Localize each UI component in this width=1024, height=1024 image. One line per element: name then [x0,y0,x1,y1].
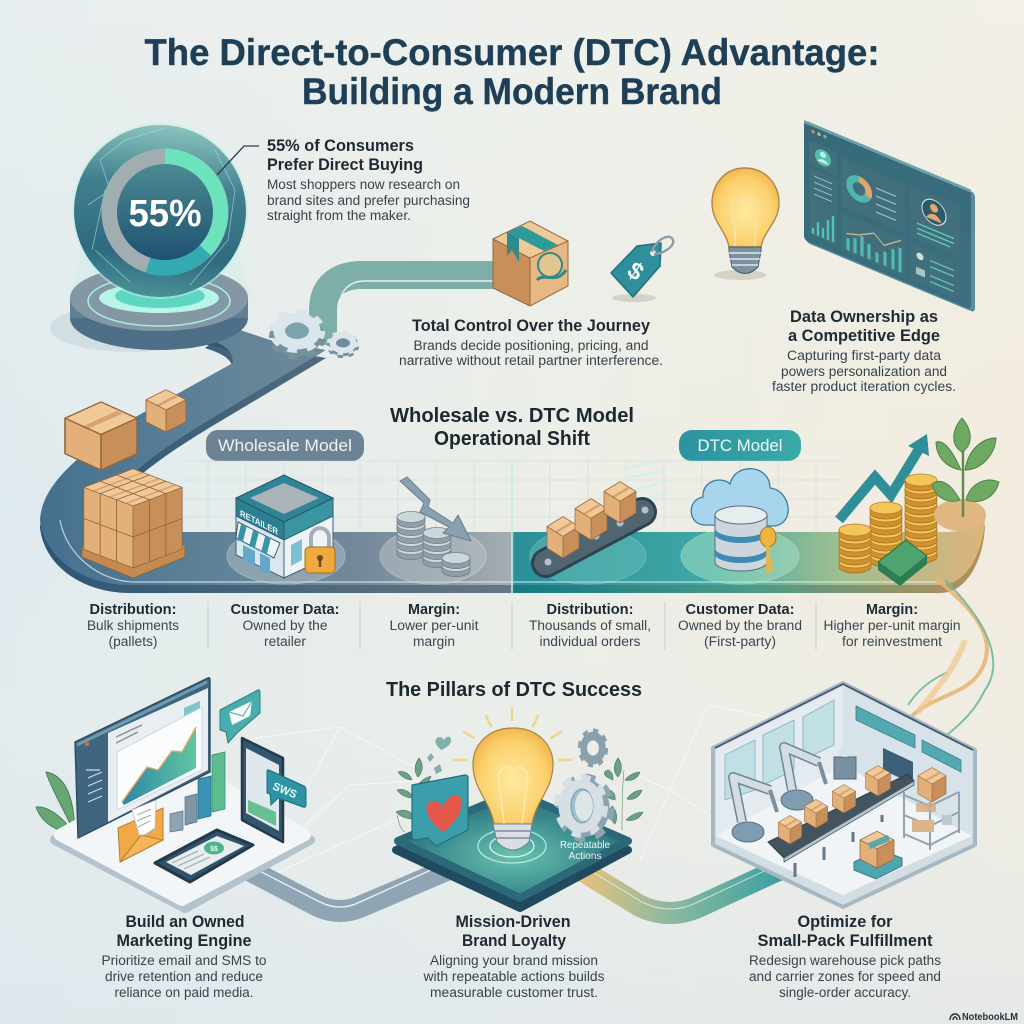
text block: brand loyalty: with repeatable actions builds [422,969,605,984]
icon: gear with repeatable actions label [558,731,610,862]
text block: data ownership: faster product iteration cycles. [772,379,956,394]
stat text block [267,137,470,223]
stat text block: 55% of Consumers [267,137,414,155]
heading: pillars: The Pillars of DTC Success [386,679,642,701]
comparison labels: Thousands of small, [529,618,651,633]
icon: falling margin coins [380,477,486,584]
watermark: NotebookLM [962,1011,1018,1023]
platform [396,792,628,908]
connector roads between pillars [230,856,800,913]
text block: data ownership [772,308,956,394]
icon: small hearts [427,737,451,774]
icon: storage rack [904,768,959,850]
icon: retailer store with lock: RETAILER [240,508,278,538]
text block: total control: Brands decide positioning, pricing, and [414,338,648,353]
comparison labels: Margin: [408,602,460,618]
comparison labels: Lower per-unit [390,618,479,633]
panel: small-pack fulfillment [713,683,975,907]
icon: price tag [611,237,673,302]
text block: fulfillment [749,913,941,1000]
icon: conveyor of small orders [530,462,672,584]
comparison labels: Distribution: [90,602,176,618]
comparison labels: margin [413,634,455,649]
stat orb: 55% [50,123,252,352]
badge: wholesale model [206,430,364,461]
teal path to product box [323,275,500,345]
comparison labels: Customer Data: [230,602,340,618]
icon: rising coins and arrow [839,434,937,586]
icon: gear with repeatable actions label: Repeatable [560,840,610,851]
comparison labels: (First-party) [704,634,776,649]
panel: mission-driven brand loyalty [396,708,643,908]
icon: gear with repeatable actions label: Actions [568,851,602,862]
text block: total control: narrative without retail partner interference. [399,353,663,368]
stat text block: Most shoppers now research on [267,177,460,192]
icon: email bubble [220,690,260,743]
text block: owned marketing: drive retention and reduce [105,969,263,984]
icon: conveyor belt [768,766,914,877]
icon: pallet of boxes [82,469,185,578]
callout line [217,146,259,175]
icon: glowing bulb [454,708,571,850]
badge: dtc model [679,430,801,461]
ribbon streams [908,578,993,735]
panel: analytics dashboard [804,120,975,313]
text block: total control: Total Control Over the Journey [412,317,651,335]
journey road and comparison band [40,325,985,593]
text block: brand loyalty: Brand Loyalty [462,932,567,950]
platform [55,765,310,908]
text block: owned marketing: Build an Owned [126,913,244,931]
icon: robot arms [732,747,856,842]
text block: brand loyalty: Aligning your brand mission [430,953,598,968]
text block: data ownership: Capturing first-party data [787,348,941,363]
icon: leaves [36,772,75,833]
icon: flat phone: $$ [210,846,218,853]
panel: owned marketing engine [36,678,310,908]
icon: retailer store with lock [227,475,345,584]
icon: price tag: $ [622,257,649,287]
icon: growth bars [170,752,225,832]
title: The Direct-to-Consumer (DTC) Advantage: [144,32,880,73]
comparison labels: Distribution: [546,602,634,618]
comparison labels: retailer [264,634,307,649]
comparison labels: Customer Data: [686,602,794,618]
text block: owned marketing: Prioritize email and SMS to [102,953,266,968]
text block: total control [399,317,663,368]
comparison labels: for reinvestment [842,634,942,649]
text block: fulfillment: and carrier zones for speed and [749,969,941,984]
icon: SMS bubble: SWS [271,781,298,801]
icon: cloud database with key [681,469,799,584]
comparison labels: Owned by the [242,618,328,633]
icon: SMS bubble [267,770,306,807]
badge: dtc model: DTC Model [698,437,782,455]
comparison labels: Higher per-unit margin [824,618,960,633]
comparison labels: individual orders [540,634,641,649]
background grid [180,461,840,532]
icon: tall phone [242,738,283,842]
text block: owned marketing [102,913,266,1000]
icon: light bulb [712,168,779,280]
comparison labels [87,602,960,650]
monitor with chart [75,678,210,838]
title [144,32,880,112]
stat text block: brand sites and prefer purchasing [267,193,470,208]
text block: fulfillment: Redesign warehouse pick paths [749,953,941,968]
icon: envelope [118,800,163,862]
text block: fulfillment: Small-Pack Fulfillment [758,932,933,950]
text block: fulfillment: single-order accuracy. [779,985,911,1000]
text block: data ownership: powers personalization and [781,364,947,379]
text block: data ownership: a Competitive Edge [788,327,940,345]
stat text block: straight from the maker. [267,208,411,223]
heading: wholesale vs dtc: Operational Shift [434,428,590,450]
icon: flat phone [155,830,253,882]
divider: wholesale vs dtc [511,462,513,594]
title: Building a Modern Brand [302,71,722,112]
heading: wholesale vs dtc [390,405,634,450]
icon: heart bubble [412,775,468,846]
comparison labels: (pallets) [108,634,158,649]
text block: data ownership: Data Ownership as [790,308,938,326]
comparison labels: Bulk shipments [87,618,179,633]
warehouse room [713,683,975,907]
icon: branded product box [493,221,568,306]
text block: owned marketing: reliance on paid media. [114,985,254,1000]
icon: growing plant [932,418,999,531]
text block: brand loyalty: Mission-Driven [456,913,570,931]
stat orb: 55%: 55% [128,193,202,235]
stat text block: Prefer Direct Buying [267,156,423,174]
icon: shipping boxes on road [65,390,186,470]
icon: gears [273,312,357,357]
icon: packed box on pallet [854,831,902,879]
badge: wholesale model: Wholesale Model [218,437,352,455]
heading: wholesale vs dtc: Wholesale vs. DTC Model [390,405,634,427]
text block: fulfillment: Optimize for [798,913,893,931]
comparison labels: Owned by the brand [678,618,802,633]
text block: brand loyalty: measurable customer trust. [430,985,598,1000]
text block: brand loyalty [422,913,605,1000]
icon: laurels [396,758,643,832]
text block: owned marketing: Marketing Engine [116,932,252,950]
comparison labels: Margin: [866,602,918,618]
